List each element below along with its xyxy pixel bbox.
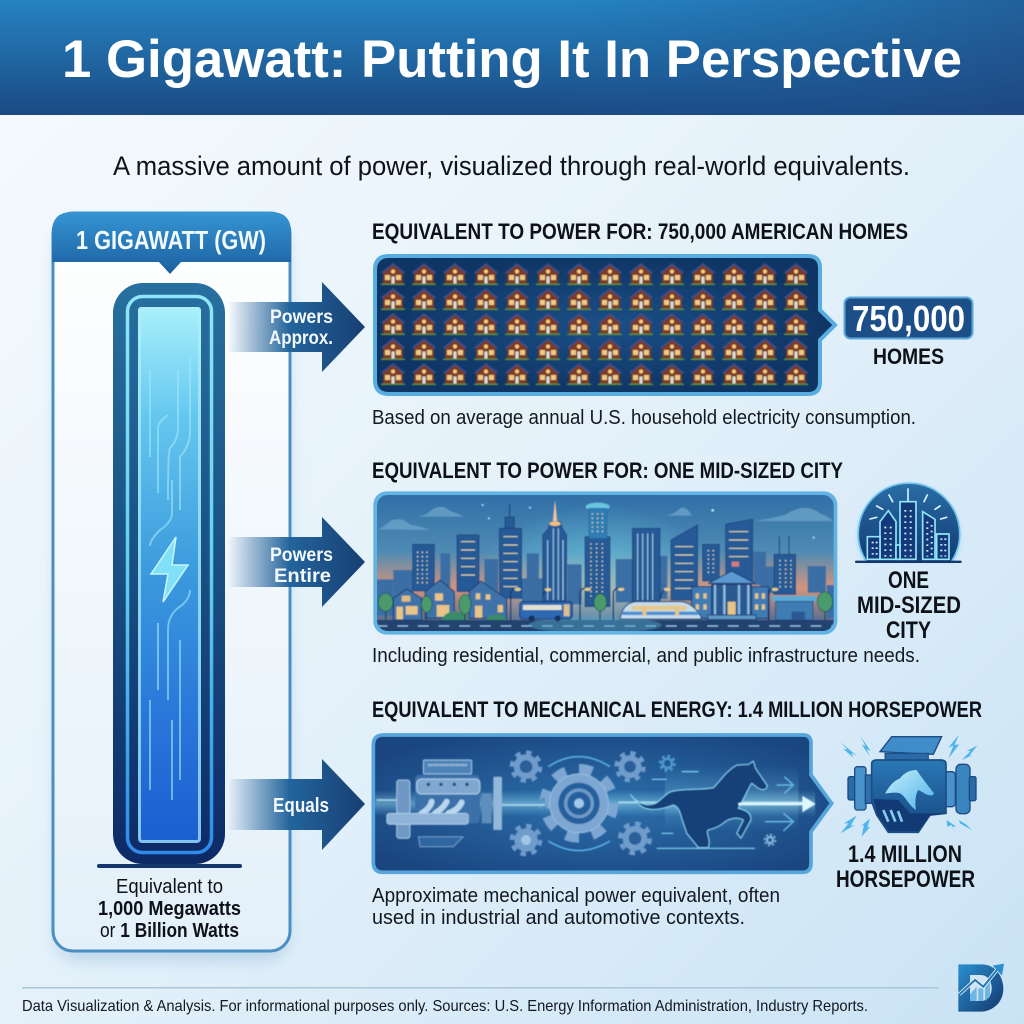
left houses — [393, 580, 507, 620]
caption: mechanical: used in industrial and automotive contexts. — [372, 907, 745, 929]
heading: homes: EQUIVALENT TO POWER FOR: 750,000 AMERICAN HOMES — [372, 219, 908, 244]
base line — [97, 864, 242, 868]
windows — [418, 513, 791, 598]
grid of houses — [381, 264, 808, 385]
label: 1.4 million horsepower — [836, 841, 975, 893]
icon: city in dome — [855, 483, 962, 563]
header banner with title — [0, 0, 1024, 115]
skyscrapers — [413, 517, 796, 607]
battery column — [97, 283, 242, 868]
arrow: powers approx — [229, 282, 365, 372]
engine — [387, 760, 502, 847]
clouds — [378, 507, 833, 530]
callout: 750,000 homes: 750,000 — [852, 298, 965, 339]
logo — [958, 964, 1004, 1012]
trees — [378, 592, 833, 620]
label: one mid-sized city: MID-SIZED — [857, 592, 961, 619]
stars — [482, 504, 815, 539]
label: one mid-sized city: CITY — [886, 617, 931, 644]
arrow: equals — [229, 759, 365, 850]
heading: city: EQUIVALENT TO POWER FOR: ONE MID-SIZED CITY — [372, 458, 843, 483]
label: 1.4 million horsepower: 1.4 MILLION — [848, 841, 962, 868]
forward arrow — [652, 772, 816, 848]
callout: 750,000 homes — [844, 298, 972, 369]
arrow: equals: Equals — [273, 795, 329, 817]
footer sources: Data Visualization & Analysis. For informational purposes only. Sources: U.S. Energy Information Administration, Industry Reports. — [22, 998, 868, 1015]
horse silhouette — [630, 761, 767, 848]
panel: homes grid — [375, 256, 835, 394]
icon: lightning bolt — [151, 537, 188, 602]
label: one mid-sized city: ONE — [888, 567, 929, 594]
panel heading bar: 1 GIGAWATT (GW) — [76, 225, 266, 255]
panel: 1 gigawatt column — [52, 212, 291, 960]
arrow: powers entire: Powers — [270, 545, 333, 566]
civic building — [692, 562, 768, 620]
caption: mechanical: Approximate mechanical power equivalent, often — [372, 885, 780, 907]
subtitle: A massive amount of power, visualized through real-world equivalents. — [113, 151, 910, 181]
road — [377, 619, 834, 631]
arrow: powers entire — [229, 517, 365, 607]
battery caption: 1,000 Megawatts — [98, 897, 241, 920]
arrow: powers entire: Entire — [274, 566, 331, 587]
battery caption — [98, 875, 241, 942]
battery caption: or 1 Billion Watts — [100, 919, 239, 942]
far buildings — [377, 552, 837, 618]
panel heading bar — [52, 212, 291, 274]
station — [772, 596, 816, 620]
spires and bright tower — [510, 504, 789, 554]
circuit traces — [150, 357, 190, 800]
bus — [520, 602, 572, 621]
panel: mechanical energy — [373, 735, 832, 872]
caption: city: Including residential, commercial, and public infrastructure needs. — [372, 645, 920, 667]
gears — [512, 753, 775, 854]
footer rule — [22, 987, 939, 988]
panel: city skyline — [373, 491, 838, 635]
battery caption: Equivalent to — [116, 875, 223, 898]
caption: homes: Based on average annual U.S. household electricity consumption. — [372, 407, 916, 429]
label: 1.4 million horsepower: HORSEPOWER — [836, 866, 975, 893]
train — [620, 602, 701, 619]
arrow: powers approx: Powers — [270, 307, 333, 328]
street lamps — [511, 588, 777, 620]
energy beam — [374, 792, 816, 815]
label: one mid-sized city — [857, 567, 961, 644]
icon: horsepower engine — [841, 735, 977, 837]
title: 1 Gigawatt: Putting It In Perspective — [62, 30, 962, 89]
callout: 750,000 homes: HOMES — [873, 344, 944, 369]
arrow: powers approx: Approx. — [269, 328, 333, 349]
caption: mechanical — [372, 885, 780, 929]
